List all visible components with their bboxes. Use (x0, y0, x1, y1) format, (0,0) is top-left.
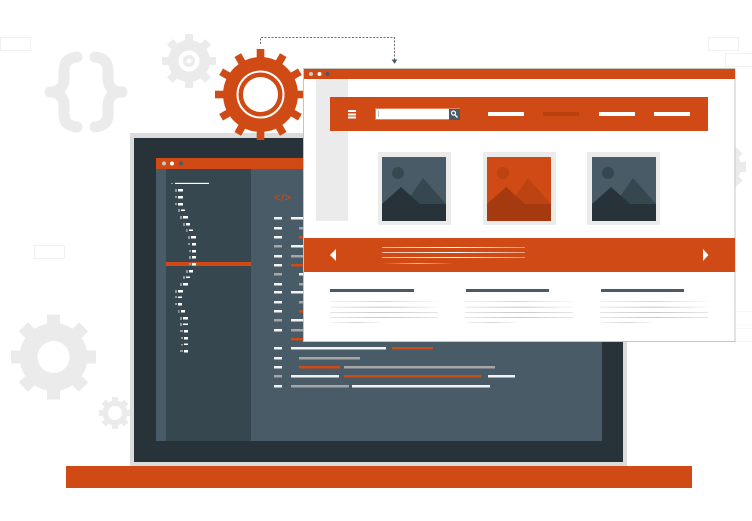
laptop base bar (66, 466, 692, 488)
arrow: carousel right (703, 249, 708, 261)
icon: light gear right (698, 146, 746, 188)
arrow: carousel left (330, 249, 336, 261)
image card 3 (587, 152, 660, 225)
panel: browser window (304, 68, 735, 342)
image card 1 (378, 152, 451, 225)
carousel band (304, 238, 735, 272)
editor file tree (166, 169, 251, 441)
navigation items (488, 112, 690, 116)
editor code area (251, 169, 602, 441)
icon: curly braces (50, 57, 122, 127)
icon: light gear top (162, 34, 216, 88)
icon: hamburger menu (348, 110, 356, 118)
code line numbers (274, 217, 282, 388)
editor gutter (156, 169, 166, 441)
laptop screen (134, 138, 623, 462)
laptop frame (130, 133, 627, 466)
content column 2 (465, 289, 573, 323)
arrow: dashed connector (260, 38, 396, 63)
icon: large orange gear (215, 49, 306, 140)
browser side column (316, 79, 348, 221)
panel: code editor window (156, 158, 602, 441)
laptop (66, 133, 692, 488)
content column 1 (330, 289, 438, 323)
image card 2 (483, 152, 556, 225)
editor title bar (156, 158, 602, 169)
icon: large light gear left (11, 314, 96, 400)
browser frame (304, 68, 735, 342)
code lines (291, 217, 515, 388)
background ghost boxes (0, 38, 752, 342)
icon: small light gear left (99, 397, 131, 429)
icon: code tag: </> (274, 190, 291, 204)
search box (375, 108, 460, 120)
browser title bar (304, 69, 735, 79)
website navigation bar (330, 97, 708, 131)
content column 3 (600, 289, 708, 323)
carousel text lines (382, 247, 525, 264)
